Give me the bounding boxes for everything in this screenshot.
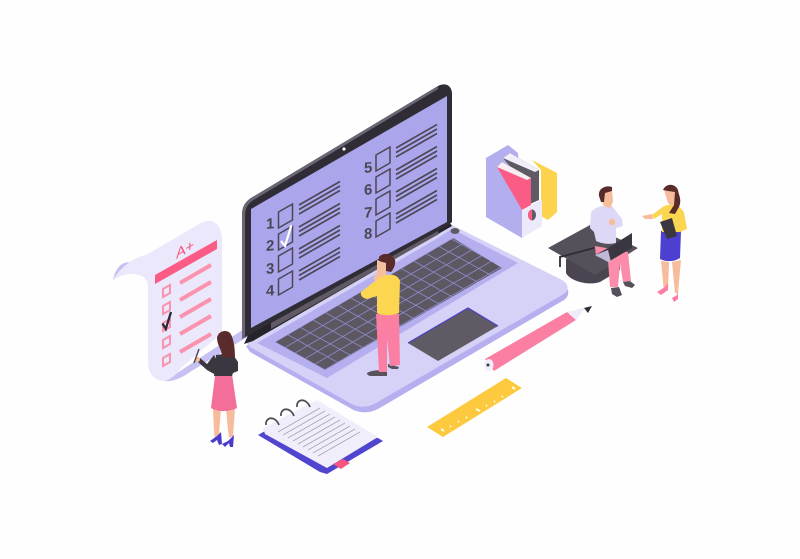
pencil [484, 306, 592, 371]
question numbers: 8 [364, 225, 372, 243]
trousers [376, 314, 400, 372]
seated man with laptop [590, 186, 635, 297]
blouse [214, 353, 238, 376]
small laptop [595, 233, 632, 262]
folder [660, 218, 677, 239]
laptop base edge [246, 226, 568, 412]
graduation cap seat [548, 225, 638, 283]
legs [661, 260, 681, 293]
pencil point [584, 306, 592, 313]
blouse [652, 203, 687, 232]
lid grey edge [242, 86, 438, 339]
neck and hand [373, 260, 386, 282]
white check mark [281, 225, 292, 246]
shoes [210, 432, 234, 447]
grade text: A+ [176, 237, 194, 263]
skirt [660, 231, 681, 261]
question numbers: 5 [364, 159, 372, 177]
arm and hand [198, 355, 218, 374]
check mark [162, 312, 171, 329]
bookmark [333, 459, 350, 469]
woman writing on paper [194, 331, 238, 447]
hair [217, 331, 235, 358]
screen [251, 96, 447, 328]
shoes [657, 283, 678, 302]
paper test sheet [113, 221, 252, 381]
hand [642, 214, 653, 219]
sheet body [113, 221, 222, 381]
hair [599, 186, 612, 202]
camera [342, 147, 346, 151]
shoes [611, 281, 635, 297]
notebook [258, 400, 383, 474]
laptop [242, 84, 568, 412]
hand [609, 219, 615, 225]
grey book [503, 153, 539, 204]
hinge strip [271, 226, 439, 329]
question numbers: 3 [266, 260, 274, 278]
pages [263, 400, 378, 468]
head [664, 188, 677, 206]
pencil end [484, 359, 494, 371]
trackpad [408, 308, 498, 361]
ruled lines [278, 408, 360, 456]
shirt [361, 275, 400, 315]
lid frame [242, 84, 452, 339]
red header bar [155, 240, 217, 284]
shirt [590, 206, 623, 244]
ruler [427, 378, 522, 437]
cap base [566, 255, 620, 283]
pink book [497, 162, 531, 210]
legs [213, 409, 235, 438]
magazine holder with books [486, 145, 557, 238]
answer lines [180, 265, 211, 352]
sheet bottom curl [165, 325, 252, 381]
standing woman with folder [642, 185, 687, 302]
question numbers: 4 [266, 282, 275, 300]
question numbers: 6 [364, 181, 372, 199]
answer text lines [299, 124, 437, 280]
binding rings [266, 400, 310, 425]
holder hole [528, 210, 536, 220]
laptop base top [246, 224, 568, 407]
question numbers: 2 [266, 237, 274, 255]
keyboard keys [275, 238, 502, 370]
hair [663, 185, 680, 214]
ruler body [427, 378, 522, 437]
question numbers [266, 159, 372, 300]
pencil body [485, 312, 576, 371]
question numbers: 7 [364, 204, 372, 222]
holder back and side [486, 145, 522, 238]
holder front [522, 199, 542, 238]
power button [450, 228, 460, 234]
pencil wood tip [567, 307, 586, 320]
yellow book [532, 160, 557, 220]
question numbers: 1 [266, 215, 274, 233]
question checkboxes [278, 147, 390, 295]
keyboard well [257, 229, 518, 378]
skirt [211, 374, 237, 411]
tassel [560, 248, 594, 267]
head [600, 190, 613, 208]
trousers [595, 246, 631, 287]
shoes [367, 364, 399, 376]
hinge [244, 219, 452, 344]
ruler ticks [441, 387, 515, 431]
sheet curl [113, 262, 150, 280]
cap top [548, 225, 638, 275]
pen [194, 349, 199, 363]
answer checkboxes [163, 285, 170, 366]
blue cover [258, 431, 383, 474]
hair [379, 254, 395, 272]
man standing on keyboard [361, 254, 400, 376]
